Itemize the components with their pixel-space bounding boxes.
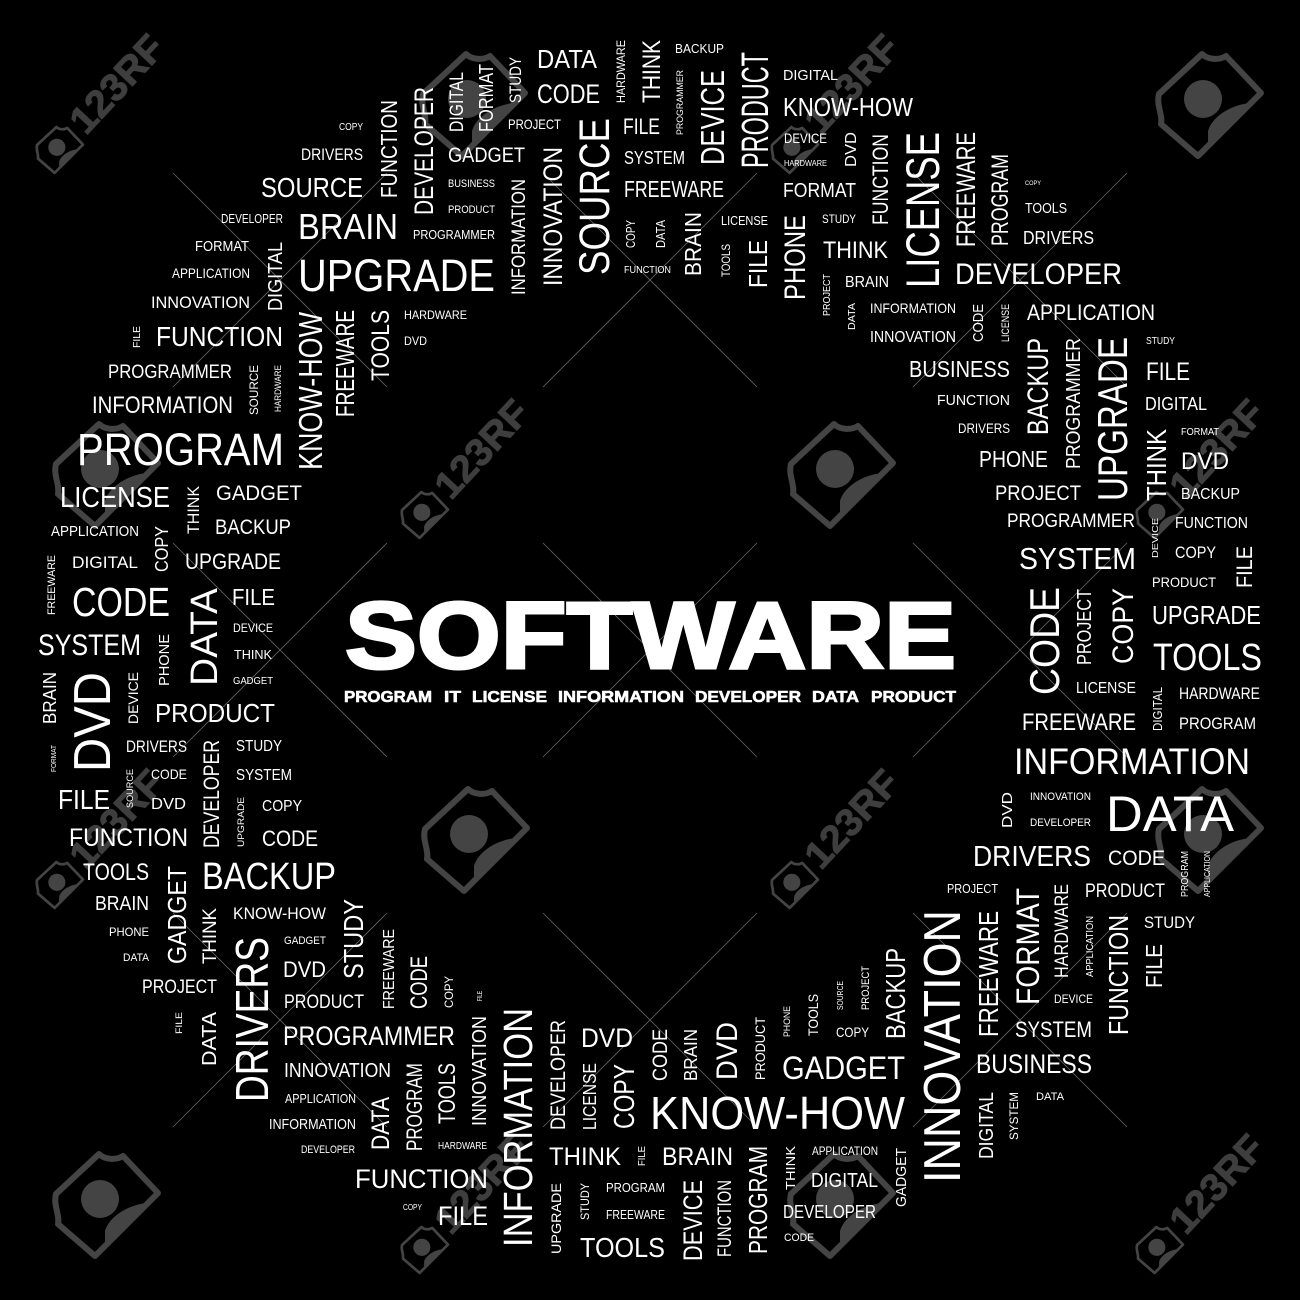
horizontal words, top and left: PRODUCT	[155, 698, 275, 728]
horizontal words, top and left: DATA	[123, 952, 150, 964]
horizontal words, right: FORMAT	[783, 180, 856, 202]
horizontal words, right: FORMAT	[1181, 427, 1219, 438]
vertical words, right: APPLICATION	[1203, 851, 1212, 897]
vertical words, top: STUDY	[506, 57, 525, 103]
horizontal words, top and left: FUNCTION	[156, 321, 283, 352]
horizontal words, top and left: PRODUCT	[284, 992, 364, 1013]
vertical words, left: HARDWARE	[273, 365, 283, 412]
vertical words, left: FORMAT	[51, 744, 58, 772]
horizontal words, top and left: THINK	[234, 647, 272, 662]
vertical words, top: PROGRAM	[987, 154, 1014, 246]
watermark logos: 123RF	[62, 762, 173, 877]
vertical words, top: PROGRAMMER	[675, 70, 685, 135]
horizontal words, right: DEVELOPER	[955, 258, 1122, 291]
vertical words, left: DEVELOPER	[199, 740, 224, 848]
horizontal words, right: FUNCTION	[1175, 515, 1248, 532]
vertical words, top: FREEWARE	[951, 132, 981, 247]
horizontal words, bottom	[269, 992, 1093, 1263]
horizontal words, top and left: SYSTEM	[624, 148, 685, 168]
horizontal words, bottom: FREEWARE	[606, 1207, 665, 1222]
vertical words, top: FUNCTION	[376, 100, 402, 198]
horizontal words, right: BUSINESS	[909, 356, 1010, 382]
subtitle: LICENSE	[472, 689, 547, 706]
horizontal words, top and left: FUNCTION	[624, 265, 671, 276]
vertical words, bottom: THINK	[783, 1146, 798, 1190]
horizontal words, right: STUDY	[1146, 336, 1175, 347]
vertical words, left: THINK	[200, 908, 221, 964]
horizontal words, top and left: PHONE	[109, 925, 149, 939]
vertical words, left: SOURCE	[247, 365, 261, 415]
horizontal words, top and left: INFORMATION	[92, 392, 233, 419]
horizontal words, bottom: DIGITAL	[811, 1170, 878, 1192]
horizontal words, right: INFORMATION	[1014, 741, 1250, 782]
horizontal words, bottom: SYSTEM	[1015, 1017, 1092, 1042]
horizontal words, bottom: COPY	[403, 1203, 423, 1212]
vertical words, bottom: FILE	[477, 991, 484, 1001]
horizontal words, top and left: BACKUP	[675, 41, 724, 56]
vertical words, top: FILE	[743, 240, 773, 288]
vertical words, top: FORMAT	[476, 64, 498, 132]
vertical words, top: COPY	[623, 220, 638, 248]
horizontal words, top and left: INNOVATION	[151, 293, 250, 312]
vertical words, top: DEVELOPER	[409, 87, 439, 215]
vertical words, bottom: PROGRAM	[402, 1063, 427, 1151]
horizontal words, bottom: KNOW-HOW	[650, 1087, 906, 1139]
vertical words, bottom	[338, 899, 911, 1261]
horizontal words, bottom: FUNCTION	[355, 1164, 488, 1194]
horizontal words, bottom: GADGET	[782, 1050, 905, 1086]
horizontal words, bottom: PROGRAMMER	[283, 1021, 455, 1051]
vertical words, right: FORMAT	[1010, 888, 1046, 1005]
vertical words, left: DATA	[199, 1011, 221, 1066]
vertical words, right: FILE	[1232, 546, 1257, 588]
horizontal words, top and left: CODE	[262, 826, 318, 851]
vertical words, bottom: DEVICE	[678, 1180, 708, 1261]
vertical words, right	[914, 337, 1257, 1183]
horizontal words, right: BACKUP	[1181, 486, 1240, 503]
vertical words, bottom: PHONE	[782, 1006, 792, 1037]
vertical words, left: TOOLS	[367, 310, 395, 381]
horizontal words, bottom: DEVELOPER	[301, 1144, 355, 1156]
horizontal words, top and left: DEVELOPER	[221, 212, 283, 226]
horizontal words, top and left: DVD	[283, 957, 326, 982]
horizontal words, top and left: HARDWARE	[404, 308, 467, 322]
horizontal words, right: PHONE	[979, 446, 1048, 472]
vertical words, right: DIGITAL	[976, 1092, 998, 1159]
horizontal words, top and left: BACKUP	[215, 516, 291, 539]
vertical words, right: FILE	[1141, 944, 1167, 988]
vertical words, bottom: BRAIN	[681, 1029, 701, 1081]
vertical words, left: FREEWARE	[330, 310, 360, 417]
horizontal words, top and left: LICENSE	[721, 213, 768, 228]
vertical words, right: INNOVATION	[914, 910, 972, 1183]
horizontal words, top and left: DRIVERS	[301, 145, 363, 164]
horizontal words, right: PROJECT	[947, 881, 998, 896]
horizontal words, top and left	[38, 41, 768, 1013]
vertical words, left: KNOW-HOW	[292, 311, 329, 470]
vertical words, left: UPGRADE	[236, 797, 246, 847]
vertical words, right: THINK	[1141, 429, 1172, 501]
horizontal words, top and left: SYSTEM	[38, 629, 141, 662]
horizontal words, top and left: PROJECT	[508, 116, 561, 132]
horizontal words, bottom: DVD	[581, 1023, 633, 1053]
horizontal words, right: INNOVATION	[1030, 791, 1091, 803]
vertical words, bottom: FREEWARE	[381, 929, 398, 1009]
horizontal words, top and left: PROJECT	[142, 977, 217, 998]
horizontal words, right: TOOLS	[1153, 637, 1262, 679]
horizontal words, right: SYSTEM	[1019, 541, 1136, 576]
vertical words, right: PROGRAMMER	[1063, 338, 1085, 469]
vertical words, top: DATA	[847, 303, 858, 330]
horizontal words, right: FUNCTION	[937, 392, 1010, 409]
watermark logos: 123RF	[427, 392, 538, 507]
vertical words, bottom: FILE	[637, 1146, 648, 1166]
horizontal words, top and left: DVD	[151, 796, 186, 813]
horizontal words, bottom: PROGRAM	[606, 1180, 665, 1195]
horizontal words, right	[783, 67, 1262, 932]
horizontal words, top and left: BUSINESS	[448, 178, 495, 190]
vertical words, right: PROJECT	[1074, 589, 1096, 665]
horizontal words, top and left: DVD	[404, 334, 427, 348]
vertical words, right: FREEWARE	[973, 911, 1004, 1037]
vertical words, bottom: UPGRADE	[548, 1183, 564, 1254]
vertical words, right: CODE	[1021, 587, 1068, 695]
vertical words, top: HARDWARE	[614, 40, 628, 103]
horizontal words, right: DIGITAL	[1145, 394, 1207, 414]
vertical words, right: HARDWARE	[1052, 884, 1073, 978]
horizontal words, right: HARDWARE	[1179, 684, 1260, 703]
vertical words, bottom: PROJECT	[860, 966, 872, 1010]
vertical words, left: BRAIN	[40, 672, 60, 724]
vertical words, bottom: FUNCTION	[715, 1180, 736, 1257]
vertical words, bottom: TOOLS	[434, 1063, 461, 1124]
horizontal words, right: PRODUCT	[1152, 574, 1216, 590]
horizontal words, top and left: BRAIN	[298, 206, 398, 247]
vertical words, right: BACKUP	[1022, 338, 1055, 435]
vertical words, top: TOOLS	[719, 244, 733, 277]
vertical words, bottom: CODE	[649, 1029, 672, 1081]
horizontal words, top and left: UPGRADE	[185, 549, 281, 574]
vertical words, top: FUNCTION	[868, 134, 893, 225]
subtitle: PRODUCT	[871, 689, 956, 706]
vertical words, left: PHONE	[156, 634, 173, 686]
horizontal words, top and left: GADGET	[216, 482, 302, 505]
vertical words, right: COPY	[1107, 588, 1140, 664]
vertical words, right: FUNCTION	[1103, 915, 1134, 1035]
horizontal words, right: DVD	[1181, 448, 1229, 475]
vertical words, left: FILE	[132, 326, 143, 348]
horizontal words, bottom: APPLICATION	[812, 1144, 878, 1158]
horizontal words, right: FREEWARE	[1022, 709, 1136, 736]
horizontal words, right: CODE	[1108, 847, 1165, 870]
horizontal words, right: BRAIN	[845, 274, 889, 291]
horizontal words, top and left: FILE	[58, 784, 110, 815]
horizontal words, right: PROGRAM	[1179, 714, 1256, 733]
horizontal words, top and left: CODE	[537, 79, 600, 109]
horizontal words, top and left: DRIVERS	[126, 737, 187, 756]
horizontal words, bottom: DEVICE	[1054, 992, 1093, 1006]
vertical words, top: DVD	[843, 132, 860, 167]
diagonal line pattern	[173, 173, 1127, 1127]
vertical words, left: GADGET	[162, 866, 192, 964]
horizontal words, top and left: FILE	[623, 114, 660, 139]
horizontal words, top and left: SYSTEM	[236, 767, 292, 784]
horizontal words, top and left: KNOW-HOW	[233, 904, 326, 923]
vertical words, bottom: TOOLS	[805, 994, 821, 1036]
vertical words, top: LICENSE	[896, 132, 949, 288]
horizontal words, top and left: SOURCE	[261, 172, 363, 203]
horizontal words, right: HARDWARE	[784, 159, 827, 168]
vertical words, left: SOURCE	[125, 769, 135, 808]
subtitle: INFORMATION	[558, 689, 684, 706]
horizontal words, top and left: COPY	[262, 798, 302, 815]
horizontal words, right: COPY	[1025, 181, 1041, 187]
vertical words, right: PROGRAM	[1180, 851, 1191, 897]
horizontal words, top and left: COPY	[339, 122, 363, 133]
horizontal words, top and left: DATA	[537, 44, 598, 74]
vertical words, top: PHONE	[779, 215, 812, 300]
horizontal words, bottom: CODE	[784, 1232, 814, 1244]
horizontal words, right: INNOVATION	[870, 329, 956, 346]
vertical words, bottom: DATA	[367, 1097, 395, 1150]
watermark logos: 123RF	[62, 27, 173, 142]
horizontal words, right: DEVELOPER	[1030, 817, 1091, 829]
horizontal words, bottom: THINK	[549, 1143, 621, 1171]
horizontal words, top and left: CODE	[151, 766, 187, 782]
horizontal words, bottom: HARDWARE	[438, 1141, 487, 1152]
vertical words, bottom: COPY	[609, 1064, 641, 1129]
horizontal words, top and left: GADGET	[284, 935, 326, 947]
vertical words, bottom: INFORMATION	[495, 1008, 541, 1247]
horizontal words, bottom: APPLICATION	[285, 1091, 356, 1106]
subtitle: DEVELOPER	[695, 689, 801, 706]
horizontal words, top and left: PROGRAM	[77, 424, 284, 475]
horizontal words, bottom: TOOLS	[580, 1232, 665, 1263]
vertical words, right: DIGITAL	[1150, 687, 1165, 731]
vertical words, left: THINK	[184, 485, 203, 534]
subtitle: PROGRAM	[344, 689, 432, 706]
vertical words, bottom: STUDY	[578, 1183, 592, 1220]
horizontal words, top and left: FORMAT	[195, 238, 249, 255]
horizontal words, top and left: GADGET	[448, 144, 525, 167]
vertical words, left	[40, 242, 395, 1102]
vertical words, bottom: LICENSE	[580, 1063, 600, 1130]
vertical words, top: DATA	[653, 220, 668, 248]
vertical words, left: COPY	[152, 526, 172, 572]
vertical words, left: DATA	[184, 587, 226, 686]
horizontal words, right: DIGITAL	[783, 67, 838, 84]
vertical words, left: FILE	[174, 1012, 184, 1034]
horizontal words, top and left: GADGET	[233, 676, 273, 687]
vertical words, bottom: COPY	[442, 976, 456, 1008]
vertical words, bottom: DVD	[711, 1022, 744, 1080]
vertical words, top: LICENSE	[1000, 304, 1012, 342]
horizontal words, top and left: PROGRAMMER	[413, 227, 495, 242]
vertical words, right: SYSTEM	[1007, 1092, 1021, 1140]
horizontal words, top and left: BACKUP	[202, 856, 336, 898]
horizontal words, bottom: BRAIN	[662, 1143, 733, 1171]
vertical words, bottom: CODE	[406, 956, 433, 1009]
horizontal words, right: LICENSE	[1076, 680, 1136, 697]
subtitle: IT	[444, 689, 461, 706]
horizontal words, top and left: PRODUCT	[448, 204, 495, 216]
vertical words, left: DVD	[64, 672, 122, 772]
horizontal words, right: DRIVERS	[958, 420, 1010, 436]
vertical words, bottom: BACKUP	[880, 948, 911, 1039]
subtitle: DATA	[812, 689, 859, 706]
vertical words, left: FREEWARE	[46, 555, 58, 615]
horizontal words, right: TOOLS	[1025, 200, 1067, 217]
horizontal words, right: DRIVERS	[1023, 228, 1094, 248]
horizontal words, bottom: INNOVATION	[284, 1060, 391, 1082]
horizontal words, top and left: DIGITAL	[72, 553, 138, 572]
watermark logos: 123RF	[427, 1127, 538, 1242]
horizontal words, right: STUDY	[822, 212, 856, 226]
vertical words, bottom: PRODUCT	[752, 1017, 768, 1080]
horizontal words, right: KNOW-HOW	[783, 92, 913, 122]
vertical words, bottom: INNOVATION	[469, 1016, 491, 1126]
horizontal words, top and left: FREEWARE	[624, 176, 724, 202]
horizontal words, right: DEVICE	[784, 130, 827, 146]
horizontal words, bottom: FILE	[438, 1201, 488, 1231]
vertical words, top: BRAIN	[680, 212, 706, 276]
horizontal words, top and left: FUNCTION	[69, 824, 188, 852]
horizontal words, top and left: APPLICATION	[51, 523, 139, 540]
vertical words, top: DEVICE	[694, 70, 731, 165]
vertical words, top: THINK	[638, 40, 666, 103]
horizontal words, right: FILE	[1146, 358, 1190, 386]
horizontal words, top and left: STUDY	[236, 738, 282, 755]
horizontal words, right: PROJECT	[995, 482, 1081, 505]
watermark logos: 123RF	[1162, 392, 1273, 507]
vertical words, left: DIGITAL	[265, 242, 287, 311]
vertical words, top: INNOVATION	[538, 147, 568, 286]
title: SOFTWARE	[345, 583, 956, 689]
vertical words, bottom: STUDY	[338, 899, 369, 979]
vertical words, bottom: DEVELOPER	[547, 1020, 570, 1130]
horizontal words, top and left: FILE	[232, 584, 275, 610]
vertical words, top: INFORMATION	[509, 179, 530, 295]
horizontal words, top and left: CODE	[72, 579, 170, 625]
subtitle	[344, 689, 956, 706]
vertical words, left: DRIVERS	[226, 937, 278, 1102]
horizontal words, bottom: INFORMATION	[269, 1116, 356, 1133]
horizontal words, top and left: UPGRADE	[298, 250, 495, 301]
vertical words, right: DEVICE	[1151, 518, 1160, 558]
horizontal words, top and left: BRAIN	[95, 893, 149, 915]
watermark logos: 123RF	[797, 762, 908, 877]
horizontal words, right: PROGRAMMER	[1007, 511, 1135, 532]
vertical words, bottom: PROGRAM	[743, 1146, 773, 1254]
vertical words, top: CODE	[970, 304, 987, 342]
horizontal words, bottom: COPY	[836, 1024, 870, 1040]
horizontal words, right: STUDY	[1144, 913, 1195, 932]
vertical words, top: DIGITAL	[447, 72, 468, 132]
horizontal words, bottom: DEVELOPER	[783, 1202, 876, 1222]
horizontal words, top and left: DEVICE	[233, 621, 273, 635]
horizontal words, right: DATA	[1106, 786, 1235, 842]
horizontal words, bottom: BUSINESS	[976, 1049, 1092, 1079]
horizontal words, top and left: PROGRAMMER	[108, 362, 232, 383]
vertical words, right: APPLICATION	[1085, 916, 1096, 977]
vertical words, top: PROJECT	[822, 274, 833, 316]
horizontal words, right: COPY	[1175, 543, 1216, 562]
horizontal words, top and left: APPLICATION	[172, 265, 250, 281]
horizontal words, right: THINK	[823, 237, 888, 264]
vertical words, right: DVD	[999, 792, 1016, 828]
vertical words, bottom: SOURCE	[836, 981, 845, 1010]
horizontal words, right: APPLICATION	[1027, 300, 1155, 325]
vertical words, left: DEVICE	[125, 672, 141, 724]
horizontal words, top and left: TOOLS	[83, 859, 149, 886]
horizontal words, bottom: DATA	[1036, 1091, 1065, 1103]
vertical words, top: SOURCE	[571, 118, 619, 275]
horizontal words, top and left: LICENSE	[60, 482, 170, 514]
horizontal words, right: INFORMATION	[870, 300, 956, 316]
watermark logos: 123RF	[797, 27, 908, 142]
horizontal words, right: PRODUCT	[1085, 881, 1165, 902]
watermark logos: 123RF	[1162, 1127, 1273, 1242]
vertical words, top	[376, 40, 1014, 342]
horizontal words, right: DRIVERS	[973, 841, 1091, 873]
horizontal words, right: UPGRADE	[1152, 600, 1261, 630]
vertical words, right: UPGRADE	[1089, 337, 1136, 501]
vertical words, bottom: GADGET	[893, 1148, 910, 1207]
